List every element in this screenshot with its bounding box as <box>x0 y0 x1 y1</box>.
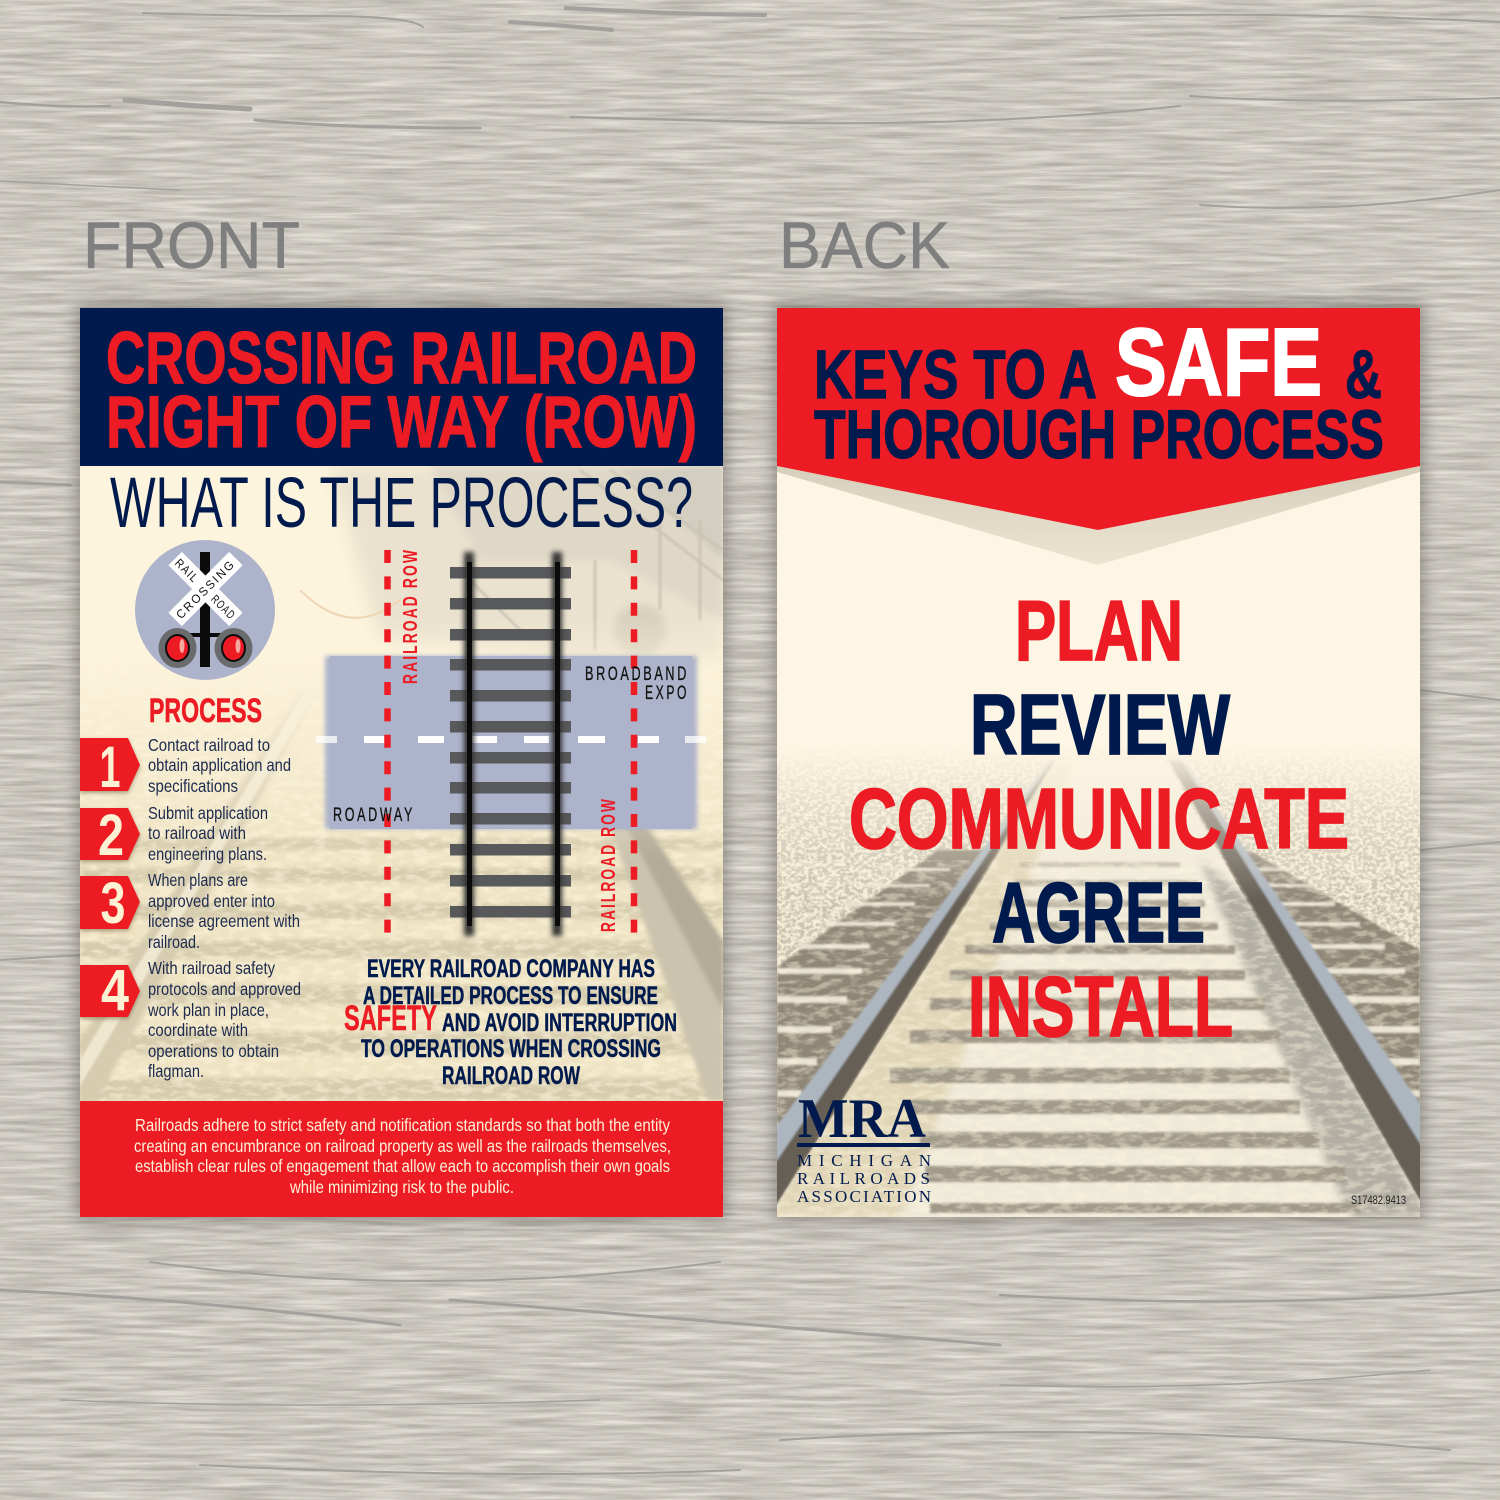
crossbuck arms: RAIL <box>172 556 202 586</box>
step 2 <box>80 803 268 868</box>
outer ties left <box>777 850 1000 1217</box>
card shadows <box>76 302 1424 1221</box>
railroad crossing sign <box>135 540 275 680</box>
step 4: protocols and approved <box>148 979 301 999</box>
crossbuck arms: ROAD <box>208 592 239 622</box>
footer band: Railroads adhere to strict safety and notification standards so that both the entity <box>135 1115 670 1135</box>
key words list: INSTALL <box>968 960 1233 1055</box>
ties <box>890 862 1360 1213</box>
step 4: 4 <box>101 958 129 1023</box>
logo: Michigan Railroads Association: ASSOCIATION <box>797 1187 931 1206</box>
background photo: track <box>777 759 1420 1217</box>
signal lights <box>158 628 252 668</box>
banner shadow chevron <box>777 466 1420 565</box>
heading: process: PROCESS <box>149 692 262 730</box>
step 3: railroad. <box>148 932 200 952</box>
step 3: When plans are <box>148 870 248 890</box>
step 2: Submit application <box>148 803 268 823</box>
step 2: 2 <box>98 803 124 868</box>
safety statement: A DETAILED PROCESS TO ENSURE <box>363 982 658 1010</box>
crossbuck arms: CROSSING <box>173 557 238 622</box>
step 2: engineering plans. <box>148 844 267 864</box>
key words list: AGREE <box>992 866 1205 961</box>
step 3: approved enter into <box>148 891 275 911</box>
banner heading <box>814 309 1384 473</box>
step 3: license agreement with <box>148 911 300 931</box>
left rail <box>709 760 1055 1217</box>
footer band: establish clear rules of engagement that allow each to accomplish their own goals <box>135 1156 670 1176</box>
safety statement: RAILROAD ROW <box>442 1062 580 1090</box>
step 3 <box>80 870 300 952</box>
panel: back card <box>777 308 1420 1217</box>
safety statement: SAFETY <box>344 999 437 1038</box>
step 4: With railroad safety <box>148 958 275 978</box>
label: BACK: BACK <box>779 208 950 282</box>
diagram labels: RAILROAD ROW <box>598 797 620 932</box>
title: RIGHT OF WAY (ROW) <box>106 382 697 463</box>
banner heading: SAFE <box>1115 309 1322 416</box>
job code: S17482.9413 <box>1351 1193 1406 1207</box>
logo: Michigan Railroads Association: RAILROADS <box>797 1169 930 1188</box>
ballast between rails <box>768 760 1430 1217</box>
panel: front card <box>80 308 723 1217</box>
key words list <box>849 584 1349 1055</box>
banner heading: KEYS TO A <box>814 336 1097 413</box>
logo: Michigan Railroads Association <box>797 1088 931 1206</box>
safety statement <box>344 955 677 1090</box>
diagram labels: EXPO <box>645 683 689 704</box>
diagram labels: RAILROAD ROW <box>400 548 422 684</box>
step 1: obtain application and <box>148 755 291 775</box>
safety statement: TO OPERATIONS WHEN CROSSING <box>361 1035 661 1063</box>
diagram labels: BROADBAND <box>585 664 689 685</box>
step 1 <box>80 735 291 800</box>
title <box>106 318 697 463</box>
footer band: creating an encumbrance on railroad property as well as the railroads themselves, <box>134 1136 671 1156</box>
step 2: to railroad with <box>148 823 246 843</box>
step 4: flagman. <box>148 1061 204 1081</box>
key words list: PLAN <box>1015 584 1183 679</box>
banner <box>777 308 1420 530</box>
outer ties right <box>1220 850 1420 1217</box>
key words list: COMMUNICATE <box>849 772 1349 867</box>
safety statement: AND AVOID INTERRUPTION <box>442 1009 677 1037</box>
diagram labels: ROADWAY <box>333 805 415 826</box>
footer band <box>80 1101 723 1217</box>
outer gravel <box>777 745 1420 1000</box>
railroad track <box>450 552 571 936</box>
subtitle: WHAT IS THE PROCESS? <box>110 464 693 543</box>
header band <box>80 308 723 466</box>
key words list: REVIEW <box>970 678 1231 773</box>
step 1: specifications <box>148 776 238 796</box>
safety statement: EVERY RAILROAD COMPANY HAS <box>367 955 655 983</box>
step 1: 1 <box>100 735 120 800</box>
background photo: locomotive <box>300 466 723 660</box>
banner heading: & <box>1345 336 1382 413</box>
footer band: while minimizing risk to the public. <box>289 1177 514 1197</box>
step 4: coordinate with <box>148 1020 248 1040</box>
step 4: work plan in place, <box>147 1000 269 1020</box>
background photo: track <box>80 692 723 1101</box>
logo: Michigan Railroads Association: MRA <box>798 1088 927 1150</box>
step 3: 3 <box>100 871 126 936</box>
step 4: operations to obtain <box>148 1041 279 1061</box>
logo: Michigan Railroads Association: MICHIGAN <box>797 1151 931 1170</box>
dashed right-of-way lines <box>388 550 634 936</box>
step 1: Contact railroad to <box>148 735 270 755</box>
roadway <box>316 656 706 829</box>
step 4 <box>80 958 301 1081</box>
title: CROSSING RAILROAD <box>106 318 697 399</box>
label: FRONT: FRONT <box>83 208 300 282</box>
diagram labels <box>333 548 689 932</box>
right rail <box>1168 760 1498 1217</box>
